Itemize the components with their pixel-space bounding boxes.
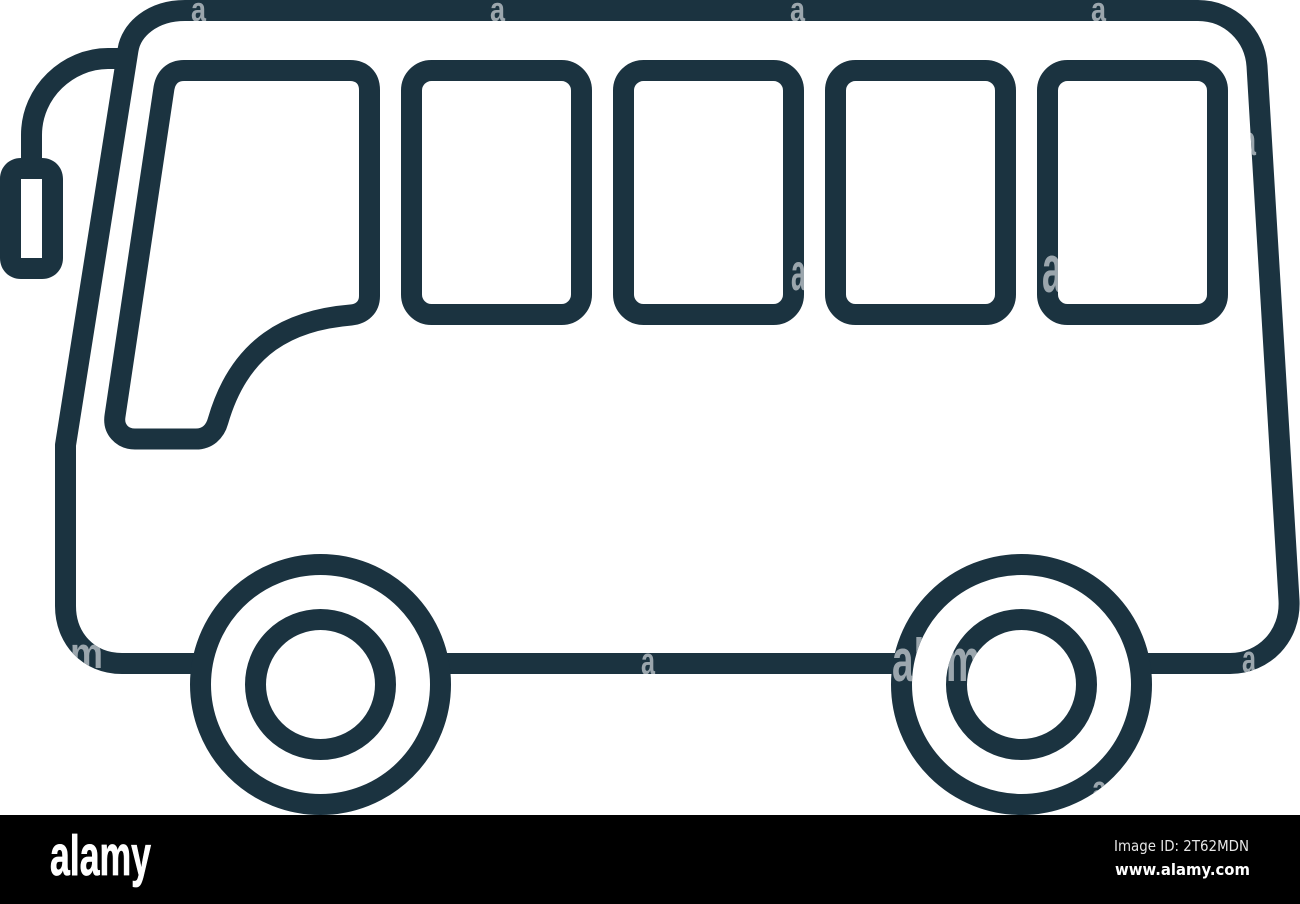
logo: alamy: alamy: [50, 824, 151, 888]
watermark fragments: m: [70, 629, 103, 678]
window 3: [836, 70, 1006, 314]
watermark fragments: a: [1092, 769, 1108, 811]
watermark fragments: a: [1042, 231, 1063, 307]
mirror: [0, 158, 63, 279]
watermark fragments: a: [791, 244, 807, 302]
website: www.alamy.com: [1115, 860, 1250, 879]
rear wheel: [902, 564, 1142, 804]
window 4: [1048, 70, 1218, 314]
watermark fragments: alamy: [892, 627, 1002, 694]
windshield: [115, 70, 370, 439]
footer bar: [0, 815, 1300, 904]
front wheel: [200, 564, 440, 804]
image id: Image ID: 2T62MDN: [1114, 837, 1249, 855]
bus body outline: [66, 10, 1289, 664]
watermark fragments: a: [1242, 117, 1256, 164]
watermark fragments: a: [641, 641, 656, 683]
watermark fragments: a: [1242, 639, 1257, 681]
window 2: [624, 70, 794, 314]
window 1: [412, 70, 582, 314]
mirror arm: [32, 58, 124, 168]
